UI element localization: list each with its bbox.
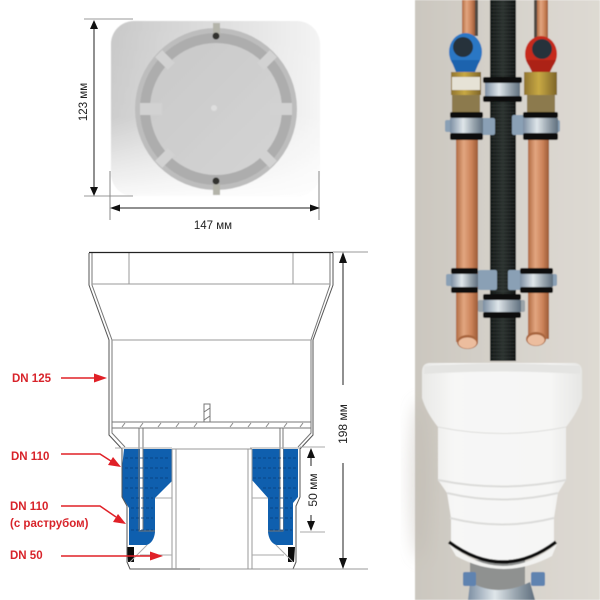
- black corrugated pipe: [490, 0, 516, 361]
- label: DN 110 with socket: (с раструбом): [10, 518, 89, 530]
- black sealing ring: [449, 542, 556, 562]
- dimension: depth 50 mm: [300, 447, 325, 532]
- internal stems (white): [140, 449, 283, 530]
- dimension: height 123 mm: [78, 19, 133, 196]
- body outline: [89, 252, 333, 569]
- white lip under ring: [449, 544, 557, 569]
- grey outlet and bottom clamp: [463, 560, 545, 600]
- blue sealing volume, left: [122, 449, 172, 545]
- label: DN 110 with socket: DN 110: [10, 501, 48, 513]
- label: DN 110: DN 110: [11, 451, 49, 463]
- top-view photo of the fitting: [111, 21, 320, 196]
- label: DN 110: [11, 451, 121, 467]
- dimension: width 147 mm: [110, 171, 320, 232]
- left copper pipe: [456, 0, 478, 349]
- lower clamps: [446, 268, 557, 318]
- dashed hatching on the blue: [125, 458, 297, 530]
- label: DN 125: [12, 373, 107, 385]
- upper clamps: [445, 77, 560, 140]
- label: DN 110 with socket: [10, 501, 126, 530]
- dimension: width 147 mm: 147 мм: [194, 220, 232, 232]
- dimension: height 123 mm: 123 мм: [78, 83, 90, 121]
- dimension: depth 50 mm: 50 мм: [306, 473, 320, 507]
- cross-section drawing: [89, 252, 333, 569]
- blue valve: [449, 33, 482, 112]
- white fitting: [422, 363, 582, 564]
- right copper pipe: [526, 0, 549, 346]
- wall: [415, 0, 600, 600]
- red valve: [524, 36, 557, 112]
- blue sealing volume, right: [252, 449, 298, 545]
- label: DN 50: [10, 550, 163, 562]
- dimension: height 198 mm: [200, 252, 368, 569]
- label: DN 125: DN 125: [12, 373, 52, 385]
- dimension: height 198 mm: 198 мм: [336, 404, 350, 444]
- seal rings: [127, 547, 295, 562]
- label: DN 50: DN 50: [10, 550, 43, 562]
- installation photo: [410, 0, 600, 600]
